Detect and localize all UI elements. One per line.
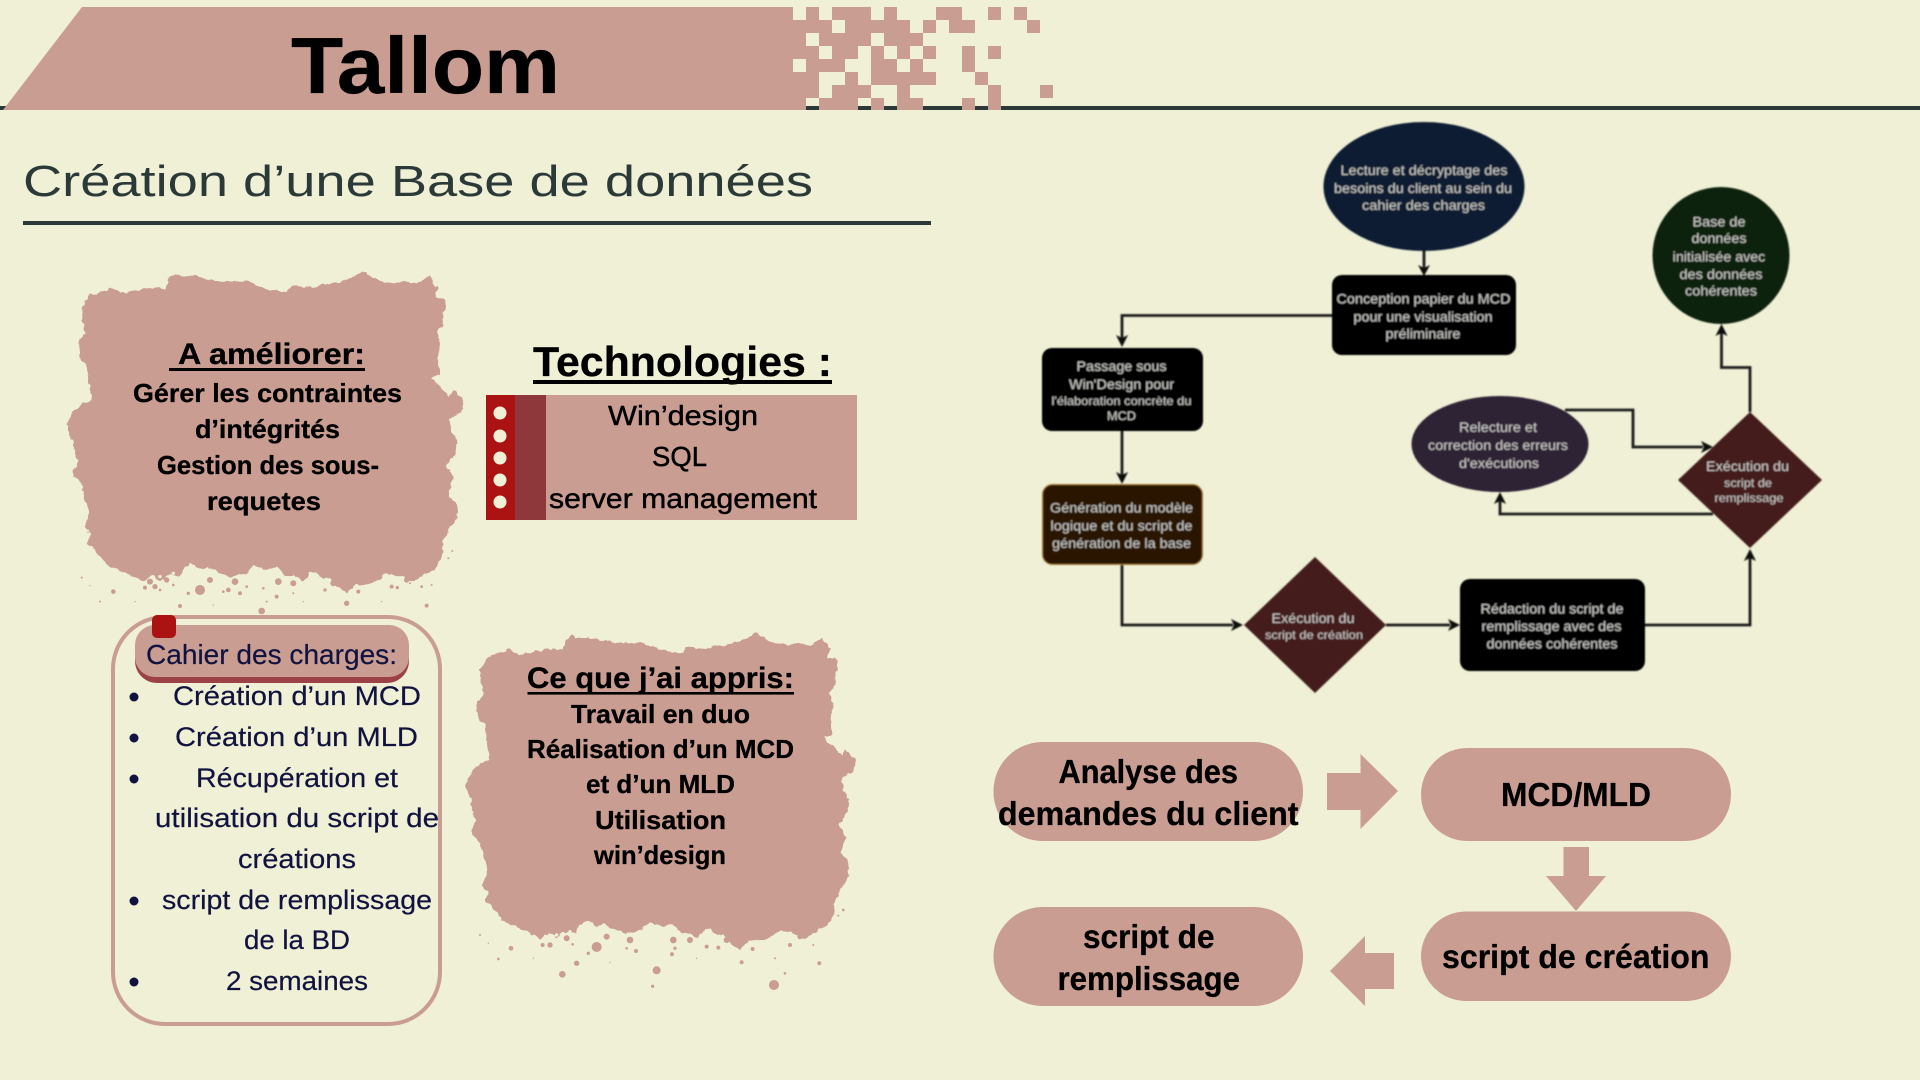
- node: relecture: Relecture et: [1459, 419, 1537, 435]
- node: conception: Conception papier du MCD: [1336, 290, 1510, 306]
- process: mcd/mld: MCD/MLD: [1501, 776, 1651, 813]
- node: relecture: d'exécutions: [1459, 455, 1539, 471]
- splatter: [479, 909, 845, 990]
- panel: cahier des charges: [113, 615, 440, 1024]
- title: Tallom: [291, 21, 560, 110]
- flowchart: [1042, 122, 1822, 693]
- heading: Ce que j’ai appris:: [527, 662, 794, 695]
- node: exécution remplissage: [1678, 412, 1822, 548]
- node: exécution création: Exécution du: [1272, 610, 1354, 626]
- node: exécution remplissage: Exécution du: [1706, 458, 1789, 474]
- header banner: [0, 7, 1920, 110]
- node: passage: MCD: [1107, 409, 1136, 423]
- body text: Utilisation: [595, 805, 726, 835]
- list text: de la BD: [244, 925, 350, 955]
- node: lecture: Lecture et décryptage des: [1340, 162, 1508, 178]
- body text: requetes: [207, 486, 321, 516]
- node: passage: [1042, 348, 1203, 431]
- subtitle: [23, 157, 931, 225]
- node: rédaction: Rédaction du script de: [1480, 600, 1624, 616]
- process: script de création: script de création: [1442, 938, 1710, 975]
- list text: Récupération et: [196, 763, 399, 793]
- panel: a améliorer: [67, 272, 464, 614]
- node: génération: Génération du modèle: [1050, 500, 1193, 516]
- body text: Gérer les contraintes: [133, 378, 402, 408]
- node: rédaction: données cohérentes: [1486, 636, 1618, 652]
- subtitle: Création d’une Base de données: [23, 157, 813, 206]
- node: rédaction: [1460, 579, 1645, 671]
- node: relecture: correction des erreurs: [1428, 437, 1568, 453]
- node: passage: Win'Design pour: [1069, 376, 1174, 392]
- node: génération: [1042, 484, 1202, 564]
- arrow: left: [1330, 936, 1394, 1006]
- body text: et d’un MLD: [586, 769, 735, 799]
- node: conception: [1332, 275, 1516, 355]
- body text: Gestion des sous-: [157, 450, 379, 480]
- process: analyse: [994, 742, 1303, 841]
- node: base de données: [1652, 187, 1790, 324]
- panel: technologies list: [486, 395, 857, 520]
- cream flecks: [158, 568, 395, 583]
- process: analyse: Analyse des: [1058, 753, 1238, 790]
- list text: utilisation du script de: [155, 803, 439, 833]
- node: lecture: besoins du client au sein du: [1334, 180, 1512, 196]
- list text: [155, 681, 439, 996]
- node: conception: préliminaire: [1386, 326, 1461, 342]
- node: base de données: Base de: [1692, 214, 1746, 230]
- node: exécution création: [1244, 557, 1386, 693]
- notebook binding: [486, 395, 515, 520]
- node: base de données: des données: [1680, 266, 1762, 282]
- list items: server management: [549, 483, 817, 514]
- body text: [133, 378, 402, 516]
- list text: Création d’un MCD: [173, 681, 421, 711]
- list items: [549, 400, 817, 514]
- process: analyse: demandes du client: [998, 795, 1299, 832]
- arrow: down: [1546, 847, 1606, 911]
- node: passage: l'élaboration concrète du: [1052, 394, 1192, 408]
- process: script de remplissage: script de: [1083, 918, 1214, 955]
- torn paper blob: [465, 633, 856, 950]
- node: exécution remplissage: remplissage: [1714, 491, 1784, 505]
- list items: SQL: [652, 441, 707, 472]
- heading: A améliorer:: [178, 338, 365, 371]
- process: mcd/mld: [1421, 748, 1731, 841]
- list text: Création d’un MLD: [175, 722, 418, 752]
- arrowheads: [1116, 265, 1756, 631]
- node: lecture: [1324, 122, 1524, 251]
- node: base de données: cohérentes: [1685, 282, 1757, 298]
- body text: [527, 699, 794, 870]
- body text: Réalisation d’un MCD: [527, 734, 794, 764]
- arrow: right: [1327, 754, 1398, 829]
- node: exécution remplissage: script de: [1724, 476, 1772, 490]
- torn paper blob: [67, 272, 464, 593]
- node: génération: génération de la base: [1052, 535, 1191, 551]
- label: Cahier des charges:: [146, 639, 397, 670]
- node: conception: pour une visualisation: [1354, 308, 1492, 324]
- cream flecks: [555, 924, 787, 939]
- process: script de création: [1421, 912, 1731, 1001]
- list text: créations: [238, 844, 356, 874]
- body text: Travail en duo: [571, 699, 750, 729]
- heading: technologies: Technologies :: [533, 338, 832, 385]
- list items: Win’design: [608, 400, 758, 431]
- splatter: [81, 550, 453, 614]
- node: relecture: [1412, 396, 1588, 492]
- node: base de données: initialisée avec: [1673, 248, 1765, 264]
- node: rédaction: remplissage avec des: [1482, 618, 1622, 634]
- body text: win’design: [593, 840, 726, 870]
- panel: ce que j'ai appris: [465, 633, 856, 990]
- flow arrows: [1122, 251, 1750, 625]
- list text: 2 semaines: [226, 966, 368, 996]
- node: lecture: cahier des charges: [1362, 197, 1485, 213]
- bullets: [130, 692, 138, 986]
- process: script de remplissage: remplissage: [1058, 960, 1240, 997]
- list text: script de remplissage: [162, 885, 432, 915]
- node: base de données: données: [1692, 230, 1746, 246]
- node: passage: Passage sous: [1076, 358, 1166, 374]
- label: [135, 615, 409, 683]
- node: génération: logique et du script de: [1050, 518, 1193, 534]
- node: exécution création: script de création: [1265, 628, 1363, 642]
- body text: d’intégrités: [195, 414, 340, 444]
- process: script de remplissage: [994, 907, 1303, 1006]
